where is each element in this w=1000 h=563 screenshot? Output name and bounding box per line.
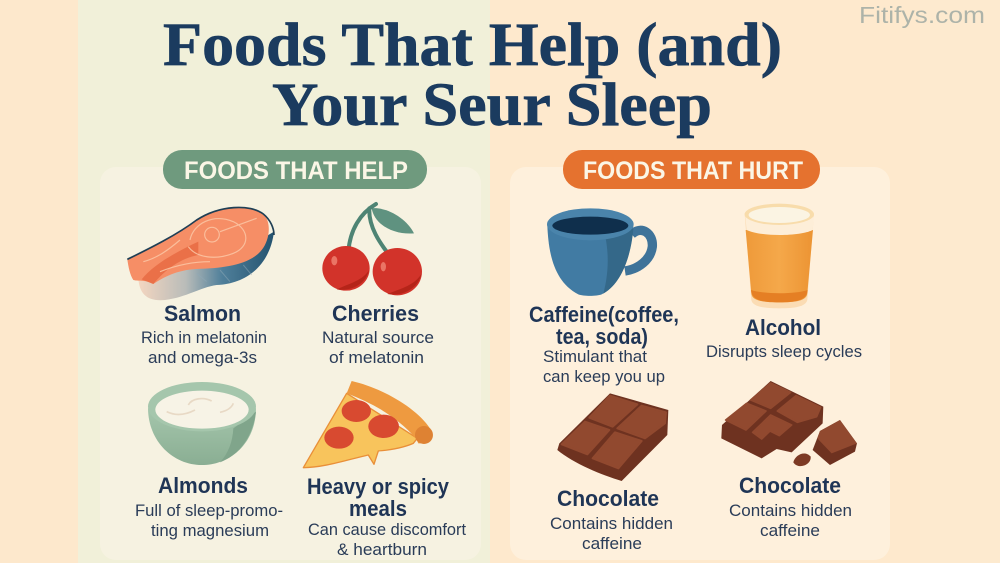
heading: foods that hurt (563, 150, 820, 189)
text: cherries (322, 301, 434, 367)
panel: foods that hurt (510, 150, 890, 560)
heading: foods that help: FOODS THAT HELP (184, 157, 408, 185)
text: alcohol: Alcohol (745, 315, 821, 340)
text: almonds: Almonds (158, 473, 248, 498)
text: almonds: Full of sleep-promo- (135, 501, 283, 520)
icon: beer glass (745, 204, 814, 308)
text: chocolate 2: Chocolate (739, 473, 841, 498)
text: heavy or spicy meals (307, 474, 466, 559)
icon: salmon (127, 207, 274, 300)
watermark: Fitifys.com (859, 2, 985, 28)
text: salmon: Salmon (164, 301, 241, 326)
text: alcohol (706, 315, 862, 361)
icon: pizza (303, 381, 433, 468)
text: caffeine: Stimulant that (543, 347, 647, 366)
text: cherries: of melatonin (329, 348, 424, 367)
text: almonds: ting magnesium (151, 521, 269, 540)
icon: chocolate bar (557, 393, 668, 481)
title: Your Seur Sleep (272, 72, 712, 139)
text: chocolate 1 (550, 486, 673, 553)
text: heavy or spicy meals: Can cause discomfort (308, 520, 466, 539)
text: cherries: Cherries (332, 301, 419, 326)
text: caffeine: Caffeine(coffee, (529, 302, 679, 327)
text: cherries: Natural source (322, 328, 434, 347)
text: alcohol: Disrupts sleep cycles (706, 342, 862, 361)
text: heavy or spicy meals: Heavy or spicy (307, 474, 450, 499)
text: chocolate 1: caffeine (582, 534, 642, 553)
text: chocolate 2: caffeine (760, 521, 820, 540)
title (163, 12, 782, 139)
icon: bowl (148, 382, 256, 465)
heading: foods that hurt: FOODS THAT HURT (583, 157, 803, 185)
text: chocolate 2 (729, 473, 852, 540)
text: chocolate 1: Chocolate (557, 486, 659, 511)
text: heavy or spicy meals: meals (349, 496, 407, 521)
heading: foods that help (163, 150, 427, 189)
text: salmon: and omega-3s (148, 348, 257, 367)
text: chocolate 2: Contains hidden (729, 501, 852, 520)
text: almonds (135, 473, 283, 540)
text: heavy or spicy meals: & heartburn (337, 540, 427, 559)
icon: broken chocolate (721, 381, 857, 466)
panel: foods that help (100, 150, 481, 560)
text: caffeine: can keep you up (543, 367, 665, 386)
title: Foods That Help (and) (163, 12, 782, 79)
icon: coffee cup (547, 208, 652, 296)
text: salmon (141, 301, 267, 367)
text: salmon: Rich in melatonin (141, 328, 267, 347)
text: caffeine (529, 302, 679, 386)
text: chocolate 1: Contains hidden (550, 514, 673, 533)
text: caffeine: tea, soda) (556, 324, 648, 349)
icon: cherries (322, 204, 422, 295)
